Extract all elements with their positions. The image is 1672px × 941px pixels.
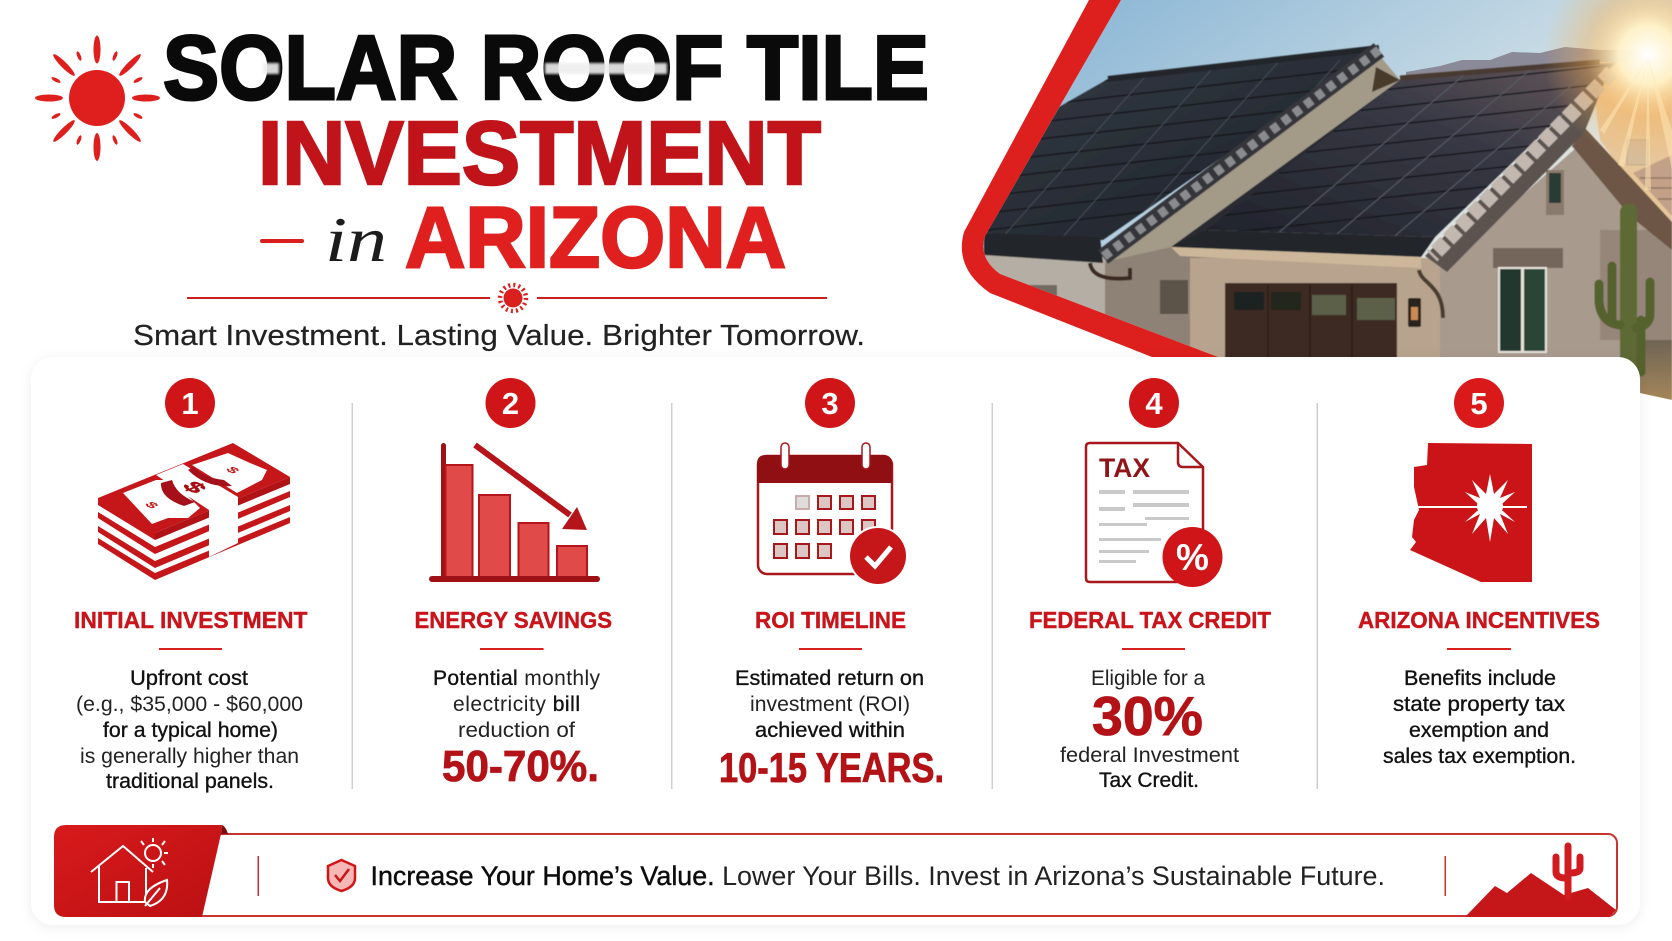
description: electricity bill <box>453 693 580 716</box>
description: 50-70%. <box>442 742 599 791</box>
heading: INITIAL INVESTMENT <box>74 607 308 633</box>
roof ridge caps <box>1108 48 1379 79</box>
number badge 1 <box>165 378 215 428</box>
description: federal Investment <box>1060 744 1239 767</box>
bottom banner <box>54 825 1617 917</box>
column 2: energy savings <box>414 378 612 791</box>
number badge 5 <box>1454 378 1504 428</box>
description: 10-15 YEARS. <box>719 744 944 791</box>
icon: tax document: TAX <box>1099 453 1150 483</box>
title line 1: SOLAR ROOF TILE <box>163 18 929 119</box>
description: (e.g., $35,000 - $60,000 <box>76 693 303 716</box>
icon: calendar with check <box>757 443 908 586</box>
description: Benefits include <box>1404 667 1556 690</box>
description: Tax Credit. <box>1099 769 1199 792</box>
icon: shield with check <box>328 860 355 891</box>
icon: house with sun and leaf <box>91 838 168 906</box>
wall lamp <box>1408 298 1421 327</box>
column 4: federal tax credit <box>1029 378 1271 792</box>
eaves <box>984 233 1103 263</box>
description: Upfront cost <box>130 667 248 690</box>
left solar roof <box>984 48 1379 240</box>
description <box>719 667 944 791</box>
description <box>433 667 600 791</box>
icon: Arizona map with sun <box>1410 443 1532 582</box>
icon: tax document: % <box>1176 537 1209 578</box>
number badge 3: 3 <box>821 386 839 421</box>
banner message: Increase Your Home’s Value. Lower Your Bills. Invest in Arizona’s Sustainable Future. <box>370 861 1385 891</box>
description <box>1383 667 1576 768</box>
window <box>1493 248 1563 268</box>
rake tiles <box>1103 50 1379 257</box>
column 5: Arizona incentives <box>1358 378 1600 768</box>
description: traditional panels. <box>106 770 274 793</box>
garage door <box>1225 283 1397 363</box>
red tab <box>221 825 228 834</box>
sun flare <box>1543 0 1672 190</box>
description: exemption and <box>1409 719 1549 742</box>
description: sales tax exemption. <box>1383 745 1576 768</box>
icon: red sun <box>35 36 160 161</box>
tagline: Smart Investment. Lasting Value. Brighter Tomorrow. <box>133 320 865 352</box>
description: 30% <box>1092 685 1203 747</box>
title <box>163 18 929 286</box>
description: investment (ROI) <box>750 693 910 716</box>
icon: stack of money <box>98 443 290 580</box>
number badge 2: 2 <box>502 386 519 421</box>
description: reduction of <box>458 719 575 742</box>
column 3: ROI timeline <box>719 378 944 791</box>
heading: ARIZONA INCENTIVES <box>1358 607 1600 633</box>
icon: stack of money: $ <box>222 465 242 475</box>
right solar roof <box>1171 80 1400 247</box>
icon: falling bar chart <box>429 443 600 582</box>
column 1: initial investment <box>74 378 308 793</box>
number badge 5: 5 <box>1470 386 1488 421</box>
icon: stack of money: $ <box>176 479 212 496</box>
red diagonal band framing the photo <box>962 0 1218 357</box>
number badge 1: 1 <box>181 386 199 421</box>
house walls <box>940 48 1672 400</box>
number badge 4 <box>1129 378 1179 428</box>
icon: tax document <box>1086 443 1222 587</box>
heading: FEDERAL TAX CREDIT <box>1029 607 1271 633</box>
number badge 2 <box>486 378 536 428</box>
photo: house with solar roof tiles <box>940 0 1672 400</box>
icon: stack of money: $ <box>141 500 161 510</box>
title line 3 dash <box>260 239 304 243</box>
cactus <box>1620 212 1637 373</box>
description: Potential monthly <box>433 667 600 690</box>
divider with small sun <box>187 285 827 311</box>
description <box>1060 667 1239 792</box>
description: state property tax <box>1393 693 1566 716</box>
title line 2: INVESTMENT <box>258 104 821 204</box>
description: Estimated return on <box>735 667 924 690</box>
number badge 4: 4 <box>1145 386 1163 421</box>
heading: ENERGY SAVINGS <box>414 607 612 633</box>
title line 3 script word: in <box>325 204 387 275</box>
title line 3 state name: ARIZONA <box>405 190 786 286</box>
icon: mountains and cactus <box>1466 846 1616 917</box>
description: Eligible for a <box>1091 667 1205 690</box>
description: is generally higher than <box>80 745 299 768</box>
description: for a typical home) <box>103 719 278 742</box>
description: achieved within <box>755 719 905 742</box>
panel: five columns card <box>31 357 1640 925</box>
mountains on the horizon <box>1406 47 1615 76</box>
heading: ROI TIMELINE <box>755 607 906 633</box>
number badge 3 <box>805 378 855 428</box>
description <box>76 667 303 793</box>
